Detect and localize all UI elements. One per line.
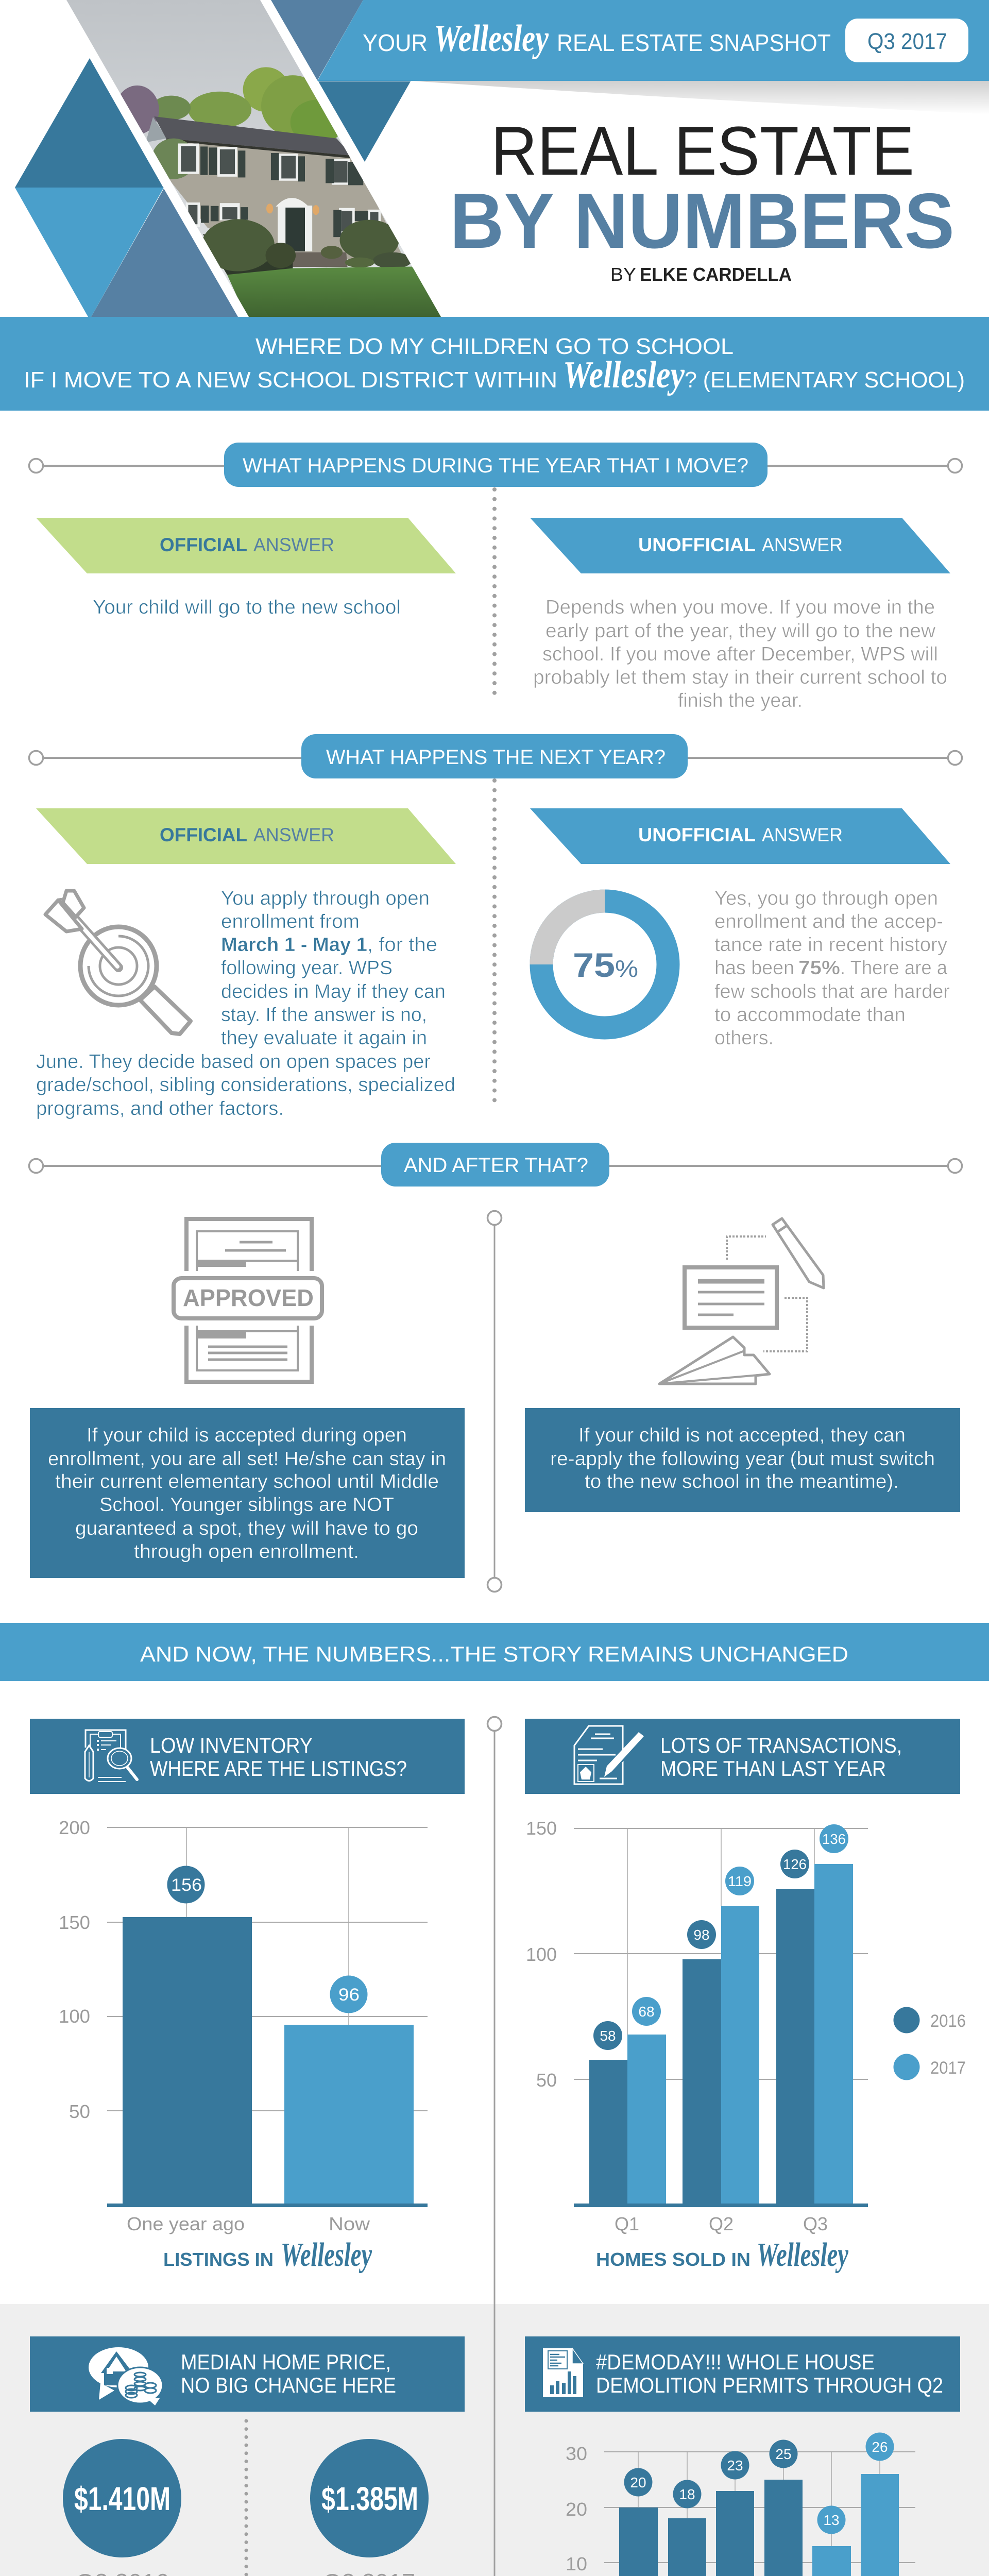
panel: median home price: [30, 2336, 465, 2576]
panel: accepted: If your child is accepted during open: [87, 1425, 407, 1446]
official answer ribbon: [36, 518, 456, 573]
bar chart: demolition permits: 26: [872, 2439, 888, 2455]
snapshot heading: [363, 18, 831, 60]
unofficial answer text: tance rate in recent history: [714, 934, 947, 956]
panel: not accepted: [525, 1408, 960, 1512]
chart caption: LISTINGS IN: [163, 2249, 274, 2270]
unofficial answer text: [533, 597, 947, 711]
pill heading with connector: AND AFTER THAT?: [404, 1154, 588, 1177]
icon: form, pencil and paper plane: [659, 1218, 824, 1384]
icon: contract and pen: [574, 1726, 644, 1784]
official answer text: following year. WPS: [221, 957, 393, 979]
icon: report document: [543, 2348, 583, 2397]
header section: [15, 0, 989, 319]
bar chart: listings: 96: [338, 1985, 360, 2005]
bar chart: demolition permits: 20: [566, 2499, 587, 2520]
official answer text: they evaluate it again in: [221, 1027, 427, 1049]
unofficial answer ribbon: [530, 518, 950, 573]
grey background panel: [0, 2304, 989, 2576]
title: REAL ESTATE: [491, 113, 914, 190]
donut chart 75%: %: [615, 955, 638, 982]
unofficial answer text: 75%: [798, 957, 840, 979]
official answer text: [36, 888, 455, 1120]
icon: approved stamp document: APPROVED: [183, 1284, 314, 1311]
unofficial answer text: few schools that are harder: [714, 981, 950, 1003]
header: [30, 2336, 465, 2412]
chart caption: [163, 2236, 372, 2274]
panel: accepted: their current elementary school until Middle: [55, 1471, 439, 1493]
unofficial answer text: to accommodate than: [714, 1004, 906, 1026]
numbers band: AND NOW, THE NUMBERS...THE STORY REMAINS UNCHANGED: [140, 1642, 848, 1666]
bar chart: homes sold: 119: [728, 1873, 752, 1889]
bar chart: demolition permits: 25: [775, 2446, 792, 2462]
section: during the year: [29, 443, 962, 711]
pill heading with connector: [29, 443, 962, 487]
pill heading with connector: [29, 1143, 962, 1187]
bar chart: homes sold: 136: [822, 1831, 846, 1847]
header: NO BIG CHANGE HERE: [181, 2373, 396, 2397]
snapshot heading: Wellesley: [434, 18, 549, 60]
icon: clipboard, pencil and magnifier: [85, 1730, 137, 1782]
stat: Q3 2017: [310, 2439, 429, 2576]
unofficial answer ribbon: UNOFFICIAL: [638, 534, 756, 555]
bar chart: homes sold: 50: [536, 2070, 557, 2091]
official answer ribbon: [36, 808, 456, 864]
title: BY NUMBERS: [450, 177, 954, 265]
unofficial answer text: school. If you move after December, WPS will: [542, 643, 938, 665]
bar chart: demolition permits: [566, 2433, 915, 2576]
header: [525, 1719, 960, 1794]
bar chart: homes sold: 126: [783, 1856, 807, 1872]
official answer text: decides in May if they can: [221, 981, 446, 1003]
main question band: Wellesley: [563, 354, 685, 396]
bar chart: homes sold: Q1: [615, 2213, 639, 2234]
title: [450, 113, 954, 265]
bar chart: listings: 50: [69, 2101, 90, 2122]
panel: accepted: guaranteed a spot, they will have to go: [75, 1518, 418, 1539]
unofficial answer text: . There are a: [840, 957, 948, 979]
donut chart 75%: 75: [573, 946, 615, 984]
legend: 2016: [930, 2011, 966, 2031]
legend: 2017: [930, 2058, 966, 2078]
main question band: ? (ELEMENTARY SCHOOL): [685, 367, 965, 393]
icon: approved stamp document: [174, 1219, 322, 1382]
panel: accepted: enrollment, you are all set! He/she can stay in: [48, 1448, 446, 1470]
pill heading with connector: WHAT HAPPENS DURING THE YEAR THAT I MOVE?: [243, 454, 748, 477]
official answer text: Your child will go to the new school: [93, 597, 401, 618]
unofficial answer text: finish the year.: [678, 690, 803, 711]
unofficial answer text: Depends when you move. If you move in the: [545, 597, 935, 618]
quarter pill: [845, 19, 968, 62]
background triangles: [15, 0, 411, 317]
legend: [893, 2007, 966, 2080]
quarter pill: Q3 2017: [867, 29, 947, 54]
panel: not accepted: If your child is not accepted, they can: [578, 1425, 906, 1446]
unofficial answer text: [714, 888, 950, 1049]
center timeline: [487, 1717, 502, 2576]
official answer text: programs, and other factors.: [36, 1098, 284, 1120]
section: and after that: [29, 1143, 962, 1592]
stat: Q3 2016: $1.410M: [74, 2480, 170, 2517]
unofficial answer text: probably let them stay in their current school to: [533, 667, 947, 688]
bar chart: listings: 200: [59, 1817, 90, 1838]
pill heading with connector: [29, 734, 962, 778]
icon: house and coins speech bubbles: [89, 2347, 163, 2405]
official answer text: March 1 - May 1: [221, 934, 367, 956]
unofficial answer text: others.: [714, 1027, 774, 1049]
header: [525, 2336, 960, 2412]
panel: not accepted: re-apply the following year (but must switch: [550, 1448, 935, 1470]
bar chart: homes sold: 150: [526, 1818, 557, 1839]
official answer text: June. They decide based on open spaces per: [36, 1051, 431, 1073]
header: #DEMODAY!!! WHOLE HOUSE: [596, 2350, 875, 2374]
pill heading with connector: WHAT HAPPENS THE NEXT YEAR?: [326, 746, 666, 769]
panel: accepted: through open enrollment.: [134, 1541, 359, 1563]
header: MORE THAN LAST YEAR: [660, 1756, 886, 1781]
byline: BY: [610, 264, 636, 285]
bar chart: homes sold: 58: [600, 2028, 616, 2044]
bar chart: listings: 156: [171, 1875, 202, 1895]
bar chart: demolition permits: 30: [566, 2443, 587, 2464]
numbers band: [0, 1623, 989, 1681]
header: MEDIAN HOME PRICE,: [181, 2350, 391, 2374]
official answer text: , for the: [367, 934, 437, 956]
section: next year: [29, 734, 962, 1120]
photo: colonial house: [62, 0, 451, 319]
bar chart: demolition permits: 10: [566, 2553, 587, 2574]
byline: ELKE CARDELLA: [640, 264, 792, 285]
main question band: WHERE DO MY CHILDREN GO TO SCHOOL: [255, 334, 734, 359]
official answer text: enrollment from: [221, 911, 360, 933]
bar chart: listings: 100: [59, 2006, 90, 2027]
bar chart: homes sold: 68: [638, 2004, 655, 2020]
official answer text: stay. If the answer is no,: [221, 1004, 427, 1026]
bar chart: homes sold: 98: [693, 1927, 710, 1943]
unofficial answer text: Yes, you go through open: [714, 888, 938, 909]
unofficial answer ribbon: ANSWER: [762, 534, 843, 555]
bar chart: demolition permits: 23: [727, 2458, 743, 2473]
unofficial answer ribbon: UNOFFICIAL: [638, 824, 756, 845]
header: WHERE ARE THE LISTINGS?: [150, 1756, 407, 1781]
shadow under top band: [412, 81, 989, 114]
top band: [317, 0, 989, 81]
icon: target with arrow: [45, 891, 191, 1034]
unofficial answer ribbon: ANSWER: [762, 824, 843, 845]
bar chart: listings: [59, 1817, 428, 2234]
main question band: IF I MOVE TO A NEW SCHOOL DISTRICT WITHIN: [24, 367, 557, 393]
donut chart 75%: [541, 901, 668, 1028]
stat: Q3 2016: [63, 2439, 181, 2576]
header: [30, 1719, 465, 1794]
official answer ribbon: ANSWER: [253, 534, 334, 555]
panel: demolition permits: [525, 2336, 960, 2576]
official answer ribbon: OFFICIAL: [160, 824, 247, 845]
official answer ribbon: ANSWER: [253, 824, 334, 845]
panel: lots of transactions: [525, 1719, 966, 2274]
unofficial answer text: enrollment and the accep-: [714, 911, 943, 933]
official answer ribbon: OFFICIAL: [160, 534, 247, 555]
panel: accepted: School. Younger siblings are NOT: [99, 1494, 394, 1516]
stat: Q3 2017: $1.385M: [321, 2480, 418, 2517]
bar chart: homes sold: Q2: [709, 2213, 734, 2234]
bar chart: demolition permits: 18: [679, 2486, 695, 2502]
panel: not accepted: to the new school in the meantime).: [585, 1471, 899, 1493]
bar chart: listings: Now: [329, 2213, 370, 2234]
main question band: [0, 317, 989, 411]
bar chart: homes sold: 100: [526, 1944, 557, 1965]
header: DEMOLITION PERMITS THROUGH Q2: [596, 2373, 943, 2397]
panel: low inventory: [30, 1719, 465, 2274]
unofficial answer ribbon: [530, 808, 950, 864]
bar chart: listings: 150: [59, 1912, 90, 1933]
chart caption: Wellesley: [757, 2236, 848, 2274]
header: LOW INVENTORY: [150, 1733, 313, 1757]
bar chart: homes sold: [526, 1818, 868, 2234]
unofficial answer text: has been: [714, 957, 794, 979]
bar chart: demolition permits: 20: [630, 2475, 646, 2490]
chart caption: [596, 2236, 848, 2274]
official answer text: You apply through open: [221, 888, 430, 909]
bar chart: homes sold: Q3: [803, 2213, 828, 2234]
bar chart: listings: One year ago: [127, 2213, 245, 2234]
unofficial answer text: early part of the year, they will go to the new: [545, 620, 936, 642]
snapshot heading: YOUR: [363, 29, 428, 56]
panel: accepted: [30, 1408, 465, 1578]
official answer text: grade/school, sibling considerations, specialized: [36, 1074, 455, 1096]
snapshot heading: REAL ESTATE SNAPSHOT: [557, 29, 831, 56]
chart caption: HOMES SOLD IN: [596, 2249, 751, 2270]
header: LOTS OF TRANSACTIONS,: [660, 1733, 902, 1757]
chart caption: Wellesley: [281, 2236, 372, 2274]
bar chart: demolition permits: 13: [823, 2512, 840, 2528]
